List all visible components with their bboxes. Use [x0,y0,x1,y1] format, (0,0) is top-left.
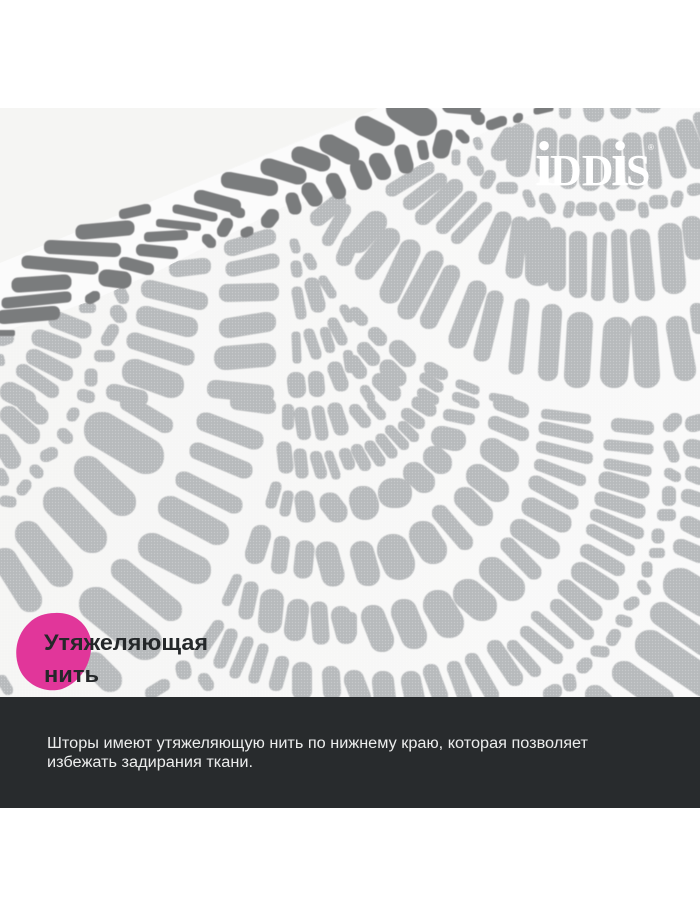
logo: iDDiS [535,128,654,199]
fabric weave texture [0,108,700,697]
logo: iDDiS: DD [550,146,614,195]
curtain pattern: grey blobs, upper left fan [0,202,510,402]
caption text: Шторы имеют утяжеляющую нить по нижнему краю, которая позволяет [47,735,588,752]
curtain pattern: grey blobs, lower left fan [0,402,349,693]
logo: iDDiS: i [611,128,629,199]
heading with pink accent [16,613,208,690]
caption text [47,735,588,771]
curtain pattern: grey blobs, lower right fan [351,401,700,702]
heading with pink accent: нить [44,662,99,687]
registered mark: ® [648,143,654,152]
folded curtain edge [0,105,550,333]
pink accent blob [16,613,91,690]
photo: shower curtain fabric [0,102,700,702]
logo: iDDiS: i [535,128,553,199]
heading text: Утяжеляющая [44,630,208,655]
wall background above the fold [0,108,378,263]
caption text: избежать задирания ткани. [47,754,253,771]
dark caption panel [0,697,700,808]
infographic canvas [0,108,700,808]
curtain pattern: grey blobs, upper right fan [358,102,700,375]
dark blobs on the fold [0,105,550,333]
logo: iDDiS: S [626,146,650,195]
